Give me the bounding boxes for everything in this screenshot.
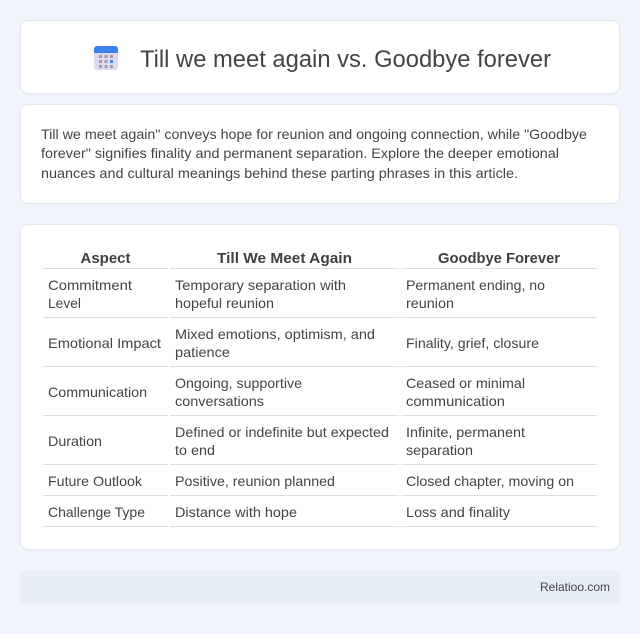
panel: intro xyxy=(20,104,620,204)
row: duration: separation xyxy=(406,442,473,458)
row: emotional impact: Emotional Impact xyxy=(48,335,161,351)
intro text xyxy=(41,126,587,181)
row: future outlook: Future Outlook xyxy=(48,473,143,489)
row: communication: conversations xyxy=(175,393,264,409)
row: challenge type: Distance with hope xyxy=(175,504,297,520)
row: communication: communication xyxy=(406,393,505,409)
row: duration: to end xyxy=(175,442,215,458)
row: future outlook: Positive, reunion planned xyxy=(175,473,335,489)
row: duration: Defined or indefinite but expected xyxy=(175,424,389,440)
title: Till we meet again vs. Goodbye forever xyxy=(140,46,551,73)
row: challenge type: Loss and finality xyxy=(406,504,510,520)
row: emotional impact: patience xyxy=(175,344,230,360)
row: commitment level: reunion xyxy=(406,295,454,311)
table header: Aspect xyxy=(80,250,130,267)
row: future outlook: Closed chapter, moving on xyxy=(406,473,574,489)
table header: Goodbye Forever xyxy=(438,250,560,267)
row: communication xyxy=(48,375,525,409)
panel: comparison table xyxy=(20,224,620,550)
intro text: Till we meet again" conveys hope for reunion and ongoing connection, while "Goodbye xyxy=(41,126,587,142)
row: emotional impact xyxy=(48,326,539,360)
row: duration xyxy=(48,424,525,458)
panel: title card xyxy=(20,20,620,94)
row: communication: Ceased or minimal xyxy=(406,375,525,391)
footer: Relatioo.com xyxy=(540,580,610,594)
row: future outlook xyxy=(48,473,574,489)
row: duration: Duration xyxy=(48,433,102,449)
row: commitment level xyxy=(48,277,545,311)
row: challenge type xyxy=(48,504,510,520)
intro text: forever" signifies finality and permanent separation. Explore the deeper emotional xyxy=(41,145,559,161)
row: commitment level: Level xyxy=(48,295,81,311)
row: commitment level: Temporary separation with xyxy=(175,277,346,293)
row: emotional impact: Finality, grief, closure xyxy=(406,335,539,351)
footer xyxy=(20,570,620,604)
row: commitment level: Commitment xyxy=(48,277,132,293)
row: emotional impact: Mixed emotions, optimism, and xyxy=(175,326,375,342)
row: communication: Ongoing, supportive xyxy=(175,375,302,391)
row: challenge type: Challenge Type xyxy=(48,504,145,520)
icon: calendar xyxy=(94,46,118,70)
table header xyxy=(80,250,560,267)
row: duration: Infinite, permanent xyxy=(406,424,525,440)
table header: Till We Meet Again xyxy=(217,250,352,267)
intro text: nuances and cultural meanings behind these parting phrases in this article. xyxy=(41,165,518,181)
row: commitment level: hopeful reunion xyxy=(175,295,274,311)
row: commitment level: Permanent ending, no xyxy=(406,277,545,293)
row: communication: Communication xyxy=(48,384,147,400)
